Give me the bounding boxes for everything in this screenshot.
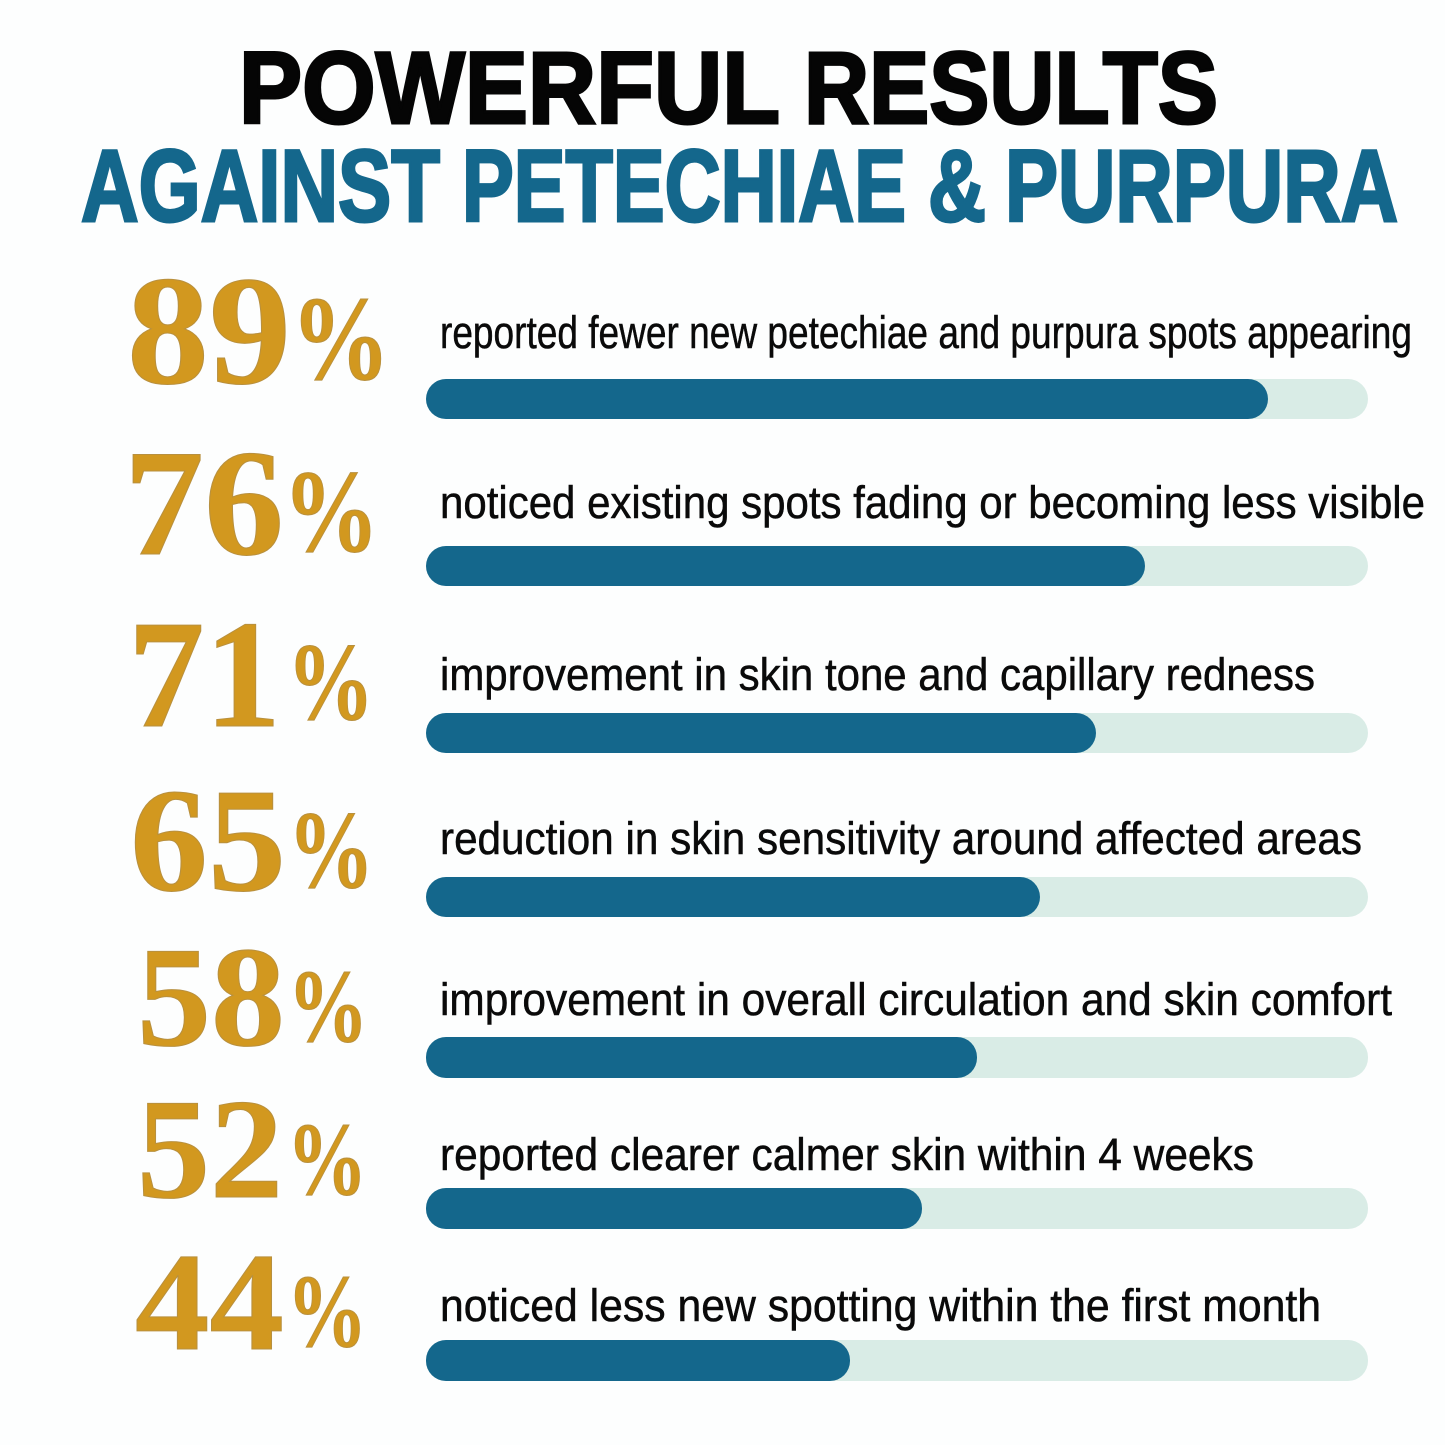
title line 2: [81, 129, 1398, 243]
stat 44%: %: [287, 1254, 367, 1369]
stat 76%: %: [283, 446, 379, 577]
row 65%: [130, 759, 1368, 923]
title line 1: RESULTS: [804, 31, 1218, 145]
title line 2: &: [928, 129, 986, 243]
stat 52%: [137, 1070, 367, 1228]
progress bar 89%: [426, 379, 1368, 419]
stat 65%: [130, 759, 374, 923]
stat 76%: [124, 419, 379, 587]
row 44%: [135, 1225, 1368, 1381]
row 52%: [137, 1070, 1368, 1229]
row 71%: [128, 590, 1368, 760]
progress bar 65%: [426, 877, 1368, 917]
stat 89%: 89: [127, 244, 291, 417]
progress bar 58%: [426, 1037, 1368, 1078]
stat 52%: 52: [137, 1070, 283, 1228]
stat 58%: [137, 918, 368, 1076]
row 89%: [127, 244, 1412, 419]
row 76%: [124, 419, 1425, 587]
progress bar 71%: [426, 713, 1368, 753]
progress bar 44%: [426, 1340, 1368, 1381]
label: reduction in skin sensitivity around affected areas: [440, 813, 1362, 864]
progress bar 76%: [426, 546, 1368, 586]
label: improvement in overall circulation and skin comfort: [440, 974, 1392, 1025]
title line 1: [239, 31, 1218, 145]
stat 76%: 76: [124, 419, 284, 587]
stat 71%: %: [287, 621, 374, 743]
stat 89%: [127, 244, 390, 417]
progress bar 52%: [426, 1188, 1368, 1229]
stat 71%: 71: [128, 590, 281, 760]
title line 2: AGAINST: [81, 129, 440, 243]
stat 65%: 65: [130, 759, 286, 923]
label: noticed less new spotting within the first month: [440, 1280, 1321, 1331]
stat 58%: %: [288, 949, 368, 1064]
stat 89%: %: [291, 272, 390, 405]
label: reported clearer calmer skin within 4 weeks: [440, 1129, 1254, 1180]
stat 44%: 44: [135, 1225, 284, 1380]
stat 52%: %: [287, 1102, 367, 1217]
stat 65%: %: [288, 789, 374, 911]
stat 44%: [135, 1225, 367, 1380]
stat 71%: [128, 590, 374, 760]
title line 2: PETECHIAE: [462, 129, 906, 243]
title: [81, 31, 1398, 243]
label: improvement in skin tone and capillary redness: [440, 649, 1315, 700]
row 58%: [137, 918, 1392, 1078]
stat 58%: 58: [137, 918, 285, 1076]
title line 1: POWERFUL: [239, 31, 780, 145]
